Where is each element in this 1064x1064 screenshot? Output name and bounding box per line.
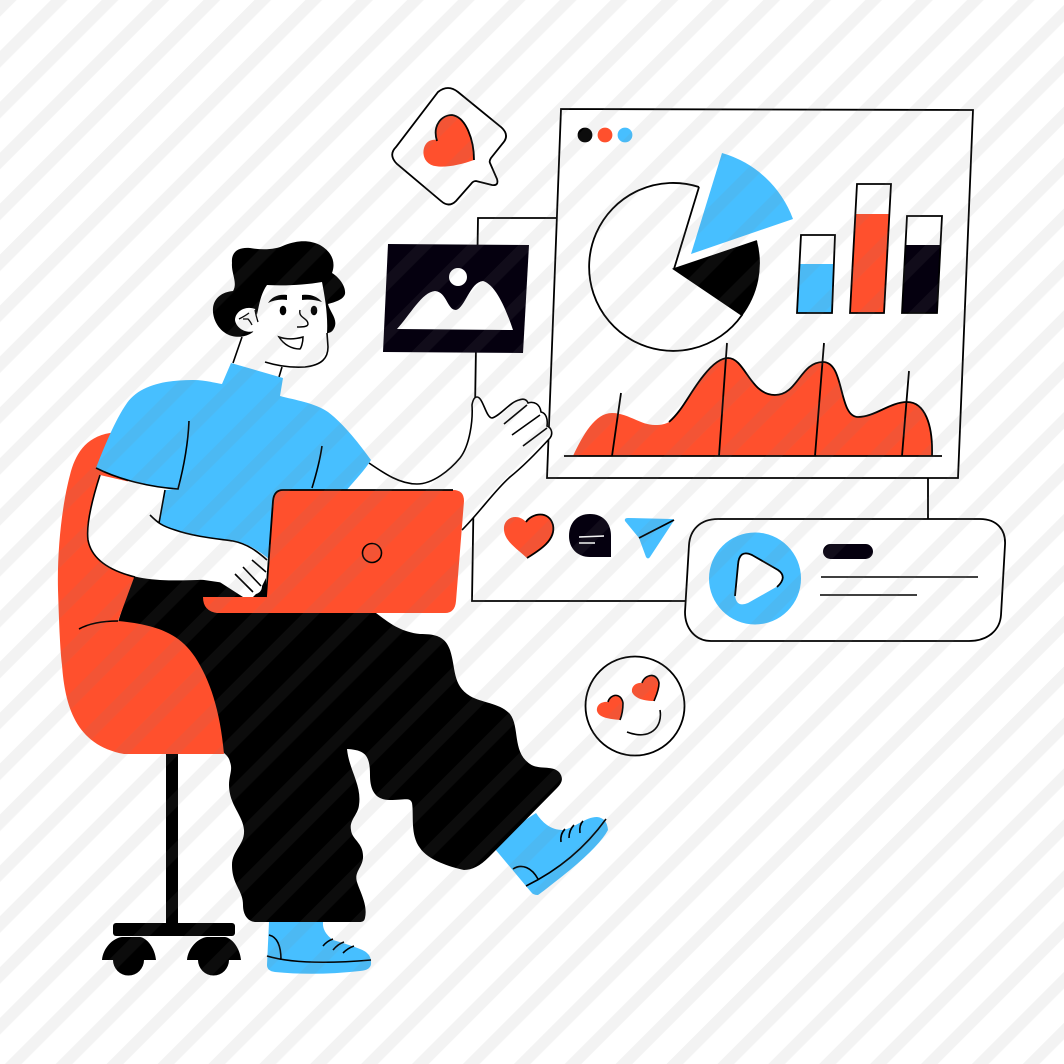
face and neck (231, 282, 328, 377)
icon: paper plane (625, 518, 674, 558)
shirt fold lines (96, 421, 322, 523)
speech bubble with heart (392, 88, 506, 204)
right arm and hand (350, 397, 552, 530)
chair stand (102, 750, 241, 976)
chair (58, 430, 224, 754)
laptop (203, 490, 464, 613)
text placeholder lines (820, 544, 978, 595)
bar chart (797, 184, 942, 313)
left arm (88, 475, 270, 597)
mouth (279, 337, 303, 349)
pie chart (589, 153, 793, 351)
area chart (564, 343, 942, 456)
ear (235, 308, 259, 332)
left shoe (267, 922, 371, 974)
jaw and neck lines (233, 333, 328, 377)
social icons: heart (504, 514, 553, 558)
trousers (118, 570, 562, 922)
emoji: heart eyes (586, 656, 684, 756)
panel: video card (685, 519, 1005, 641)
play button (709, 532, 801, 624)
shirt (96, 363, 371, 560)
hair (213, 241, 345, 337)
window dots (578, 128, 632, 142)
facial features (233, 295, 328, 377)
left arm outline and fingers (88, 475, 267, 597)
nose (297, 310, 308, 327)
icon: chat bubble (569, 514, 611, 557)
back panel outline (472, 218, 928, 601)
right shoe (490, 813, 608, 895)
panel: dashboard (547, 109, 973, 478)
eyes and brows (268, 295, 322, 315)
image card (383, 244, 529, 353)
